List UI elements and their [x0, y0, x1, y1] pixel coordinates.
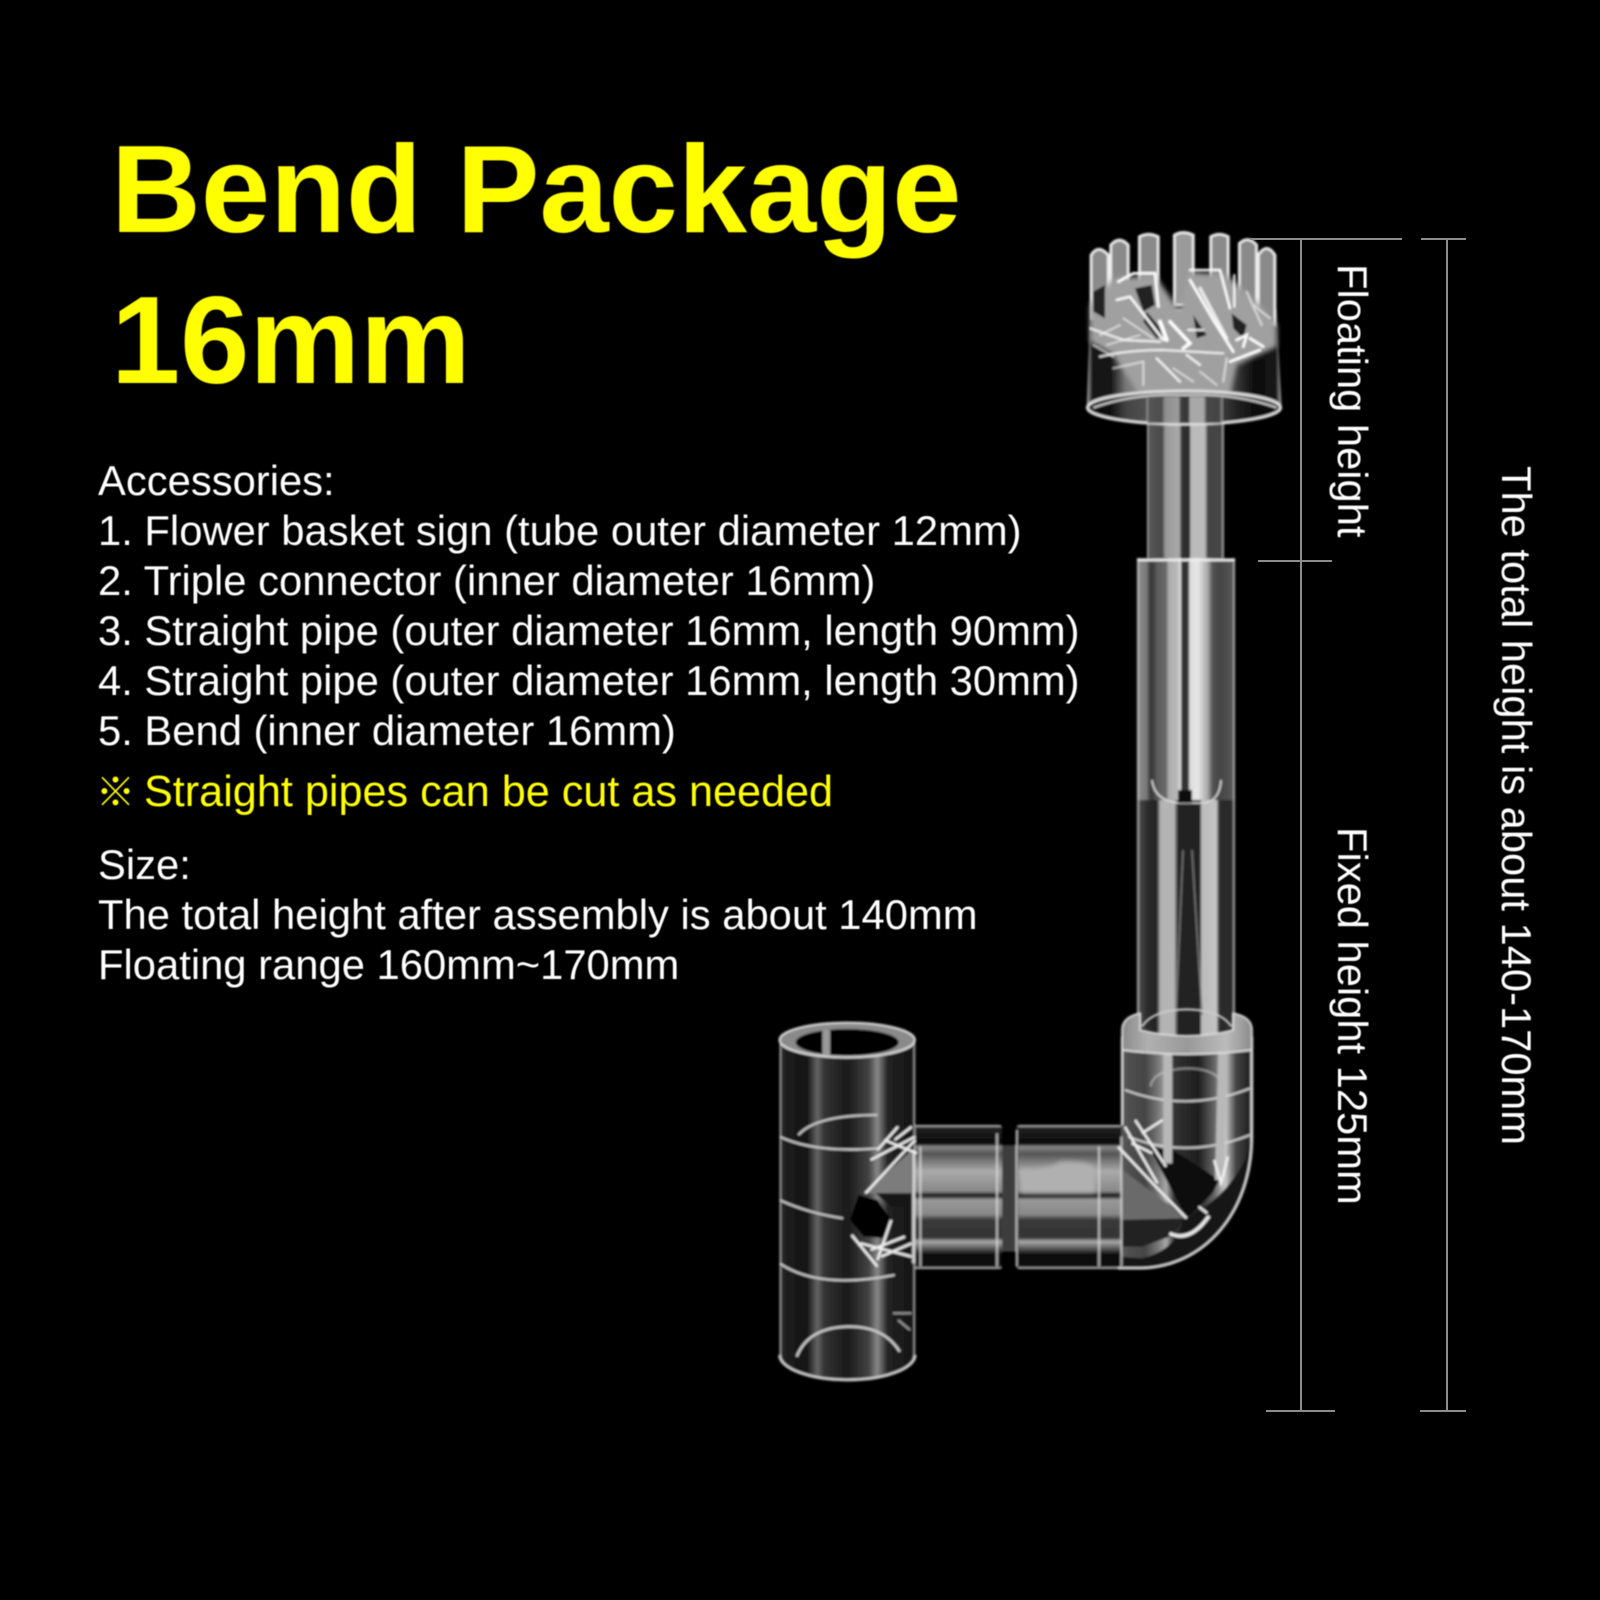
accessories list: 4. Straight pipe (outer diameter 16mm, length 30mm): [98, 657, 1080, 704]
elbow collar: [1122, 1013, 1252, 1054]
product: tee and elbow: [780, 1009, 1252, 1380]
tee body: [780, 1040, 915, 1380]
yellow note: Straight pipes can be cut as needed: [144, 768, 833, 816]
inner tube end: [1152, 780, 1221, 803]
elbow feather highlights: [1118, 1050, 1228, 1218]
crystal mass fill: [1090, 272, 1277, 395]
dimension lines: [1250, 239, 1466, 1411]
tee opening: [796, 1029, 899, 1056]
title: Bend Package: [111, 120, 961, 259]
label: fixed height: Fixed height 125mm: [1329, 827, 1376, 1205]
size text block: Floating range 160mm~170mm: [98, 941, 679, 988]
accessories list: 5. Bend (inner diameter 16mm): [98, 707, 676, 754]
collar opening: [1142, 1009, 1231, 1027]
label: total height: The total height is about 140-170mm: [1493, 466, 1540, 1145]
basket rim: [1087, 391, 1281, 424]
tee top rim: [780, 1023, 915, 1057]
inner tube: [1147, 405, 1224, 561]
size text block: Size:: [98, 841, 191, 888]
size text block: [98, 841, 978, 988]
basket body: [1087, 308, 1282, 424]
title: 16mm: [111, 271, 471, 410]
outer sleeve lower: [1137, 800, 1235, 1040]
tube seen through rim: [1147, 397, 1223, 423]
accessories list: 1. Flower basket sign (tube outer diameter 12mm): [98, 507, 1022, 554]
accessories list: 2. Triple connector (inner diameter 16mm): [98, 557, 875, 604]
product: upright pipe: [1137, 405, 1235, 1040]
accessories list: [98, 457, 1080, 754]
accessories list: Accessories:: [98, 457, 335, 504]
tee side opening: [864, 1150, 912, 1193]
size text block: The total height after assembly is about 140mm: [98, 891, 978, 938]
right blotch: [1020, 1161, 1096, 1193]
accessories list: 3. Straight pipe (outer diameter 16mm, length 90mm): [98, 607, 1080, 654]
crystal dark gaps: [1093, 285, 1247, 338]
tube details: [920, 1037, 1252, 1268]
horizontal pipe right: [1017, 1125, 1121, 1269]
label: floating height: Floating height: [1329, 264, 1376, 538]
crystal highlights: [1090, 270, 1270, 385]
horizontal pipe left: [914, 1125, 1002, 1269]
yellow note: ※: [96, 772, 135, 815]
tee details: [780, 1115, 915, 1380]
title: [111, 120, 961, 410]
product: flower basket: [1087, 232, 1282, 424]
basket teeth: [1091, 232, 1275, 325]
elbow body: [1118, 1043, 1252, 1268]
tee feather highlights: [852, 1127, 917, 1267]
rim inner ring: [1093, 395, 1277, 408]
horizontal connector: [998, 1145, 1018, 1252]
elbow dark wedge: [1149, 1147, 1219, 1218]
outer sleeve upper: [1137, 558, 1235, 803]
